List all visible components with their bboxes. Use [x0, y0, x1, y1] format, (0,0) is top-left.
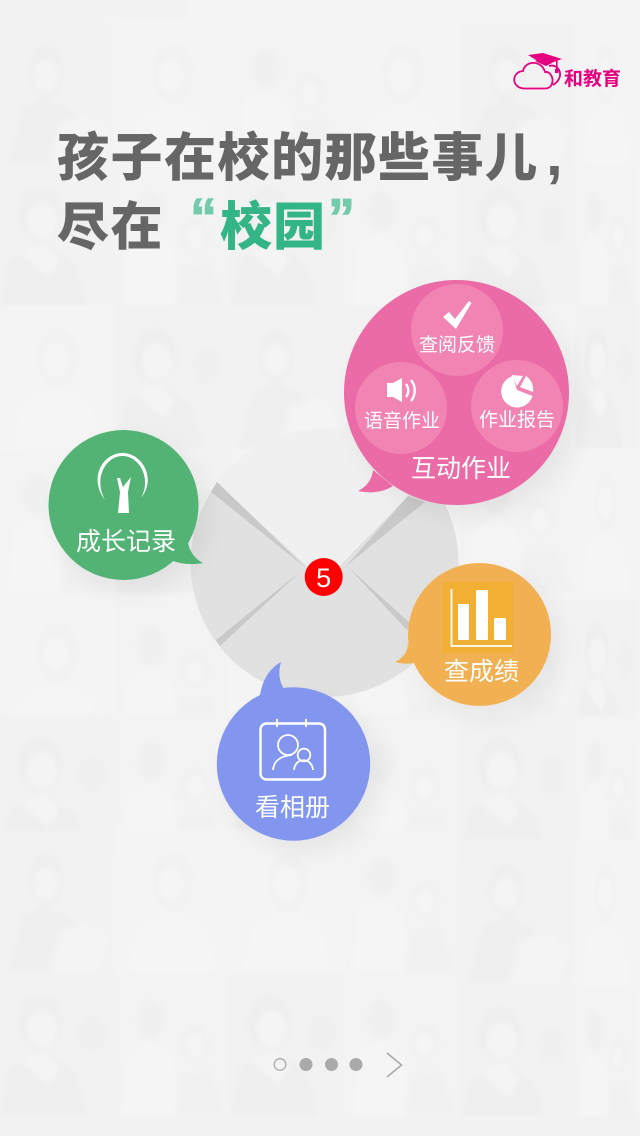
icon: speaker [387, 378, 415, 402]
envelope fold: bottom-right [348, 567, 410, 630]
logo wordmark: 和教育 [564, 67, 621, 90]
title line 2: “ [190, 188, 217, 248]
panel: 互动作业 bubble [344, 280, 569, 505]
title line 2 [57, 188, 355, 257]
icon: cloud outline [514, 63, 560, 88]
envelope flap [218, 429, 409, 566]
panel: 成长记录 bubble [48, 430, 203, 580]
label: 成长记录: 成长记录 [76, 528, 176, 556]
icon: pie chart [501, 375, 533, 407]
sub-bubble: 查阅反馈: 查阅反馈 [419, 334, 495, 356]
envelope fold: top-left [211, 482, 306, 568]
icon: graduation cap [528, 53, 562, 73]
title line 2: 尽在 [57, 199, 164, 257]
envelope illustration [190, 482, 458, 697]
logo: 和教育 [514, 53, 621, 90]
icon: bar chart [443, 582, 513, 653]
pagination dots [274, 1058, 362, 1071]
panel: 看相册 bubble [217, 662, 370, 841]
notification badge [305, 558, 343, 596]
bubble shadows [58, 292, 578, 852]
label: 看相册: 看相册 [255, 794, 330, 822]
sub-bubble: 语音作业: 语音作业 [364, 410, 440, 432]
icon: photo album calendar [260, 719, 325, 780]
title line 1: , [546, 121, 563, 188]
sub-bubble: 作业报告 [471, 360, 563, 452]
envelope fold: bottom-left [216, 570, 302, 646]
sub-bubble: 作业报告: 作业报告 [479, 409, 555, 431]
arrow: next page [387, 1053, 402, 1077]
notification badge: 5 [316, 563, 331, 593]
envelope fold: top-right [346, 496, 425, 566]
title [57, 121, 563, 257]
title line 2: 校园 [220, 199, 326, 257]
sub-bubble: 查阅反馈 [411, 284, 503, 376]
sub-bubble: 语音作业 [355, 362, 447, 454]
label: 查成绩: 查成绩 [444, 658, 519, 686]
icon: check mark [443, 301, 472, 329]
panel: 查成绩 bubble [395, 563, 551, 706]
icon: tree [98, 453, 148, 513]
label: 互动作业: 互动作业 [411, 455, 511, 483]
title line 2: ” [328, 188, 355, 248]
title line 1: 孩子在校的那些事儿 [57, 130, 539, 188]
